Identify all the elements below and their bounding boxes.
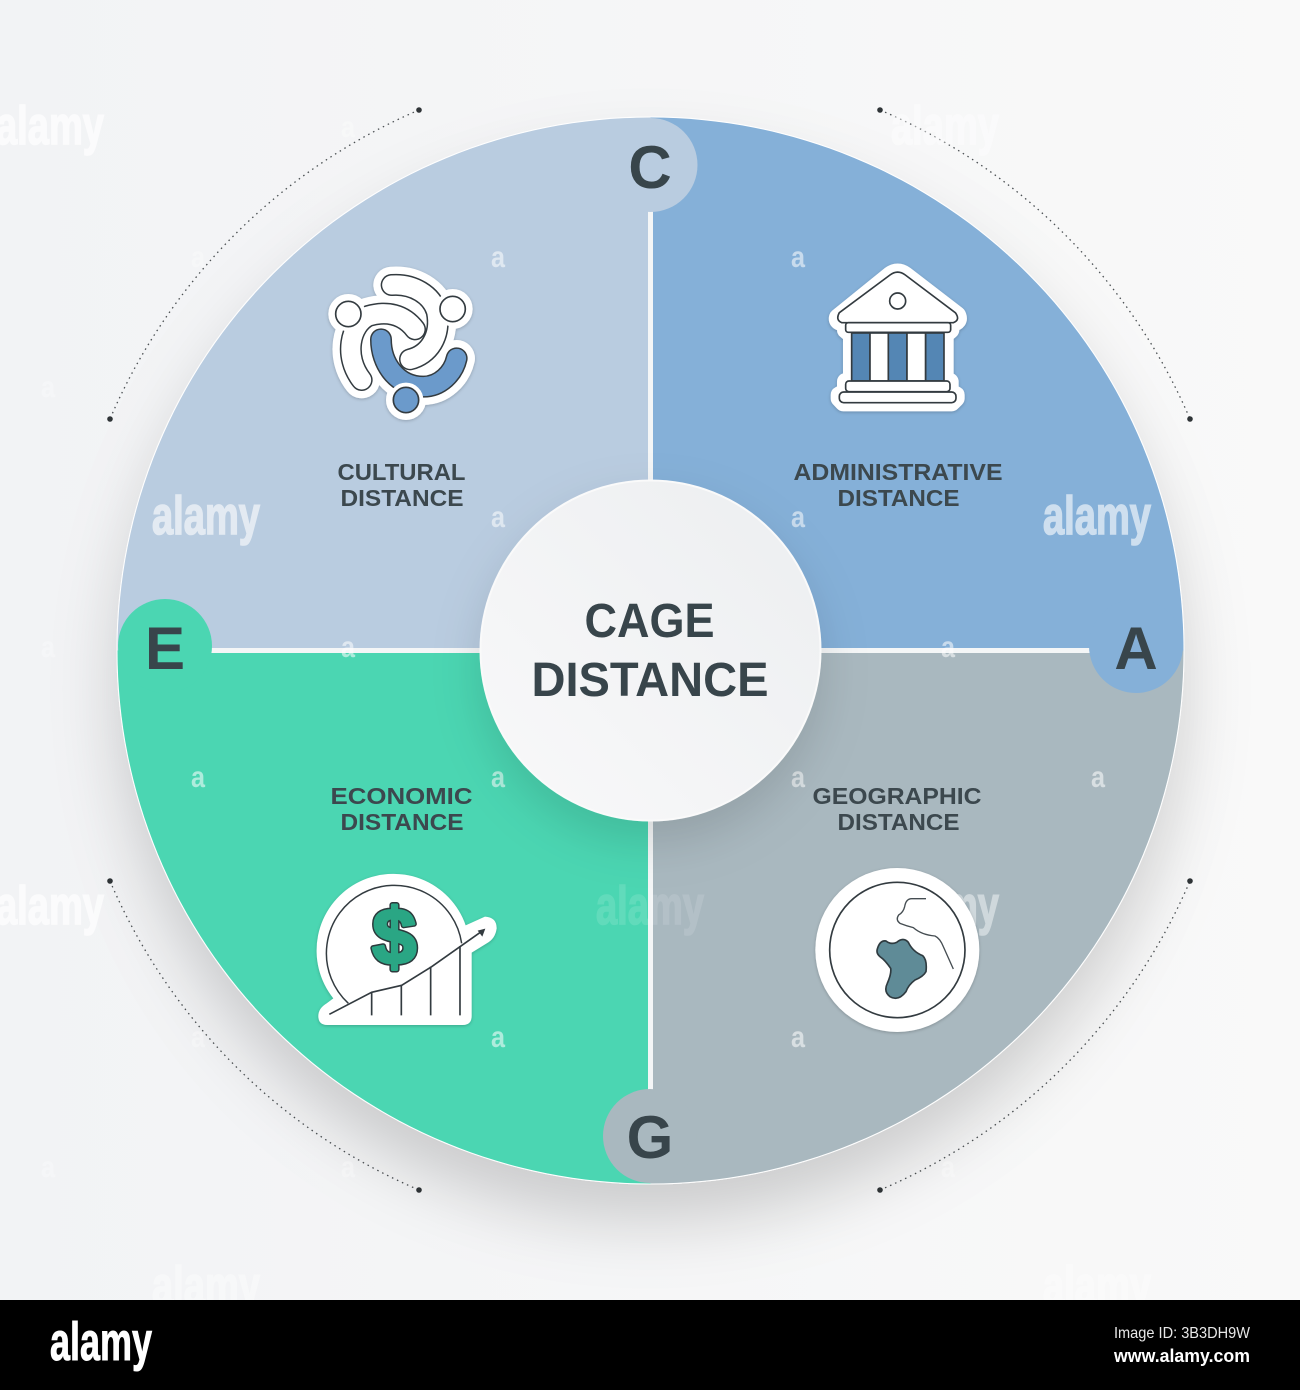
watermarks: a: [941, 1151, 955, 1184]
decorative dotted arcs: [107, 107, 1193, 1193]
badge: E: E: [145, 615, 185, 682]
label: administrative distance: [794, 459, 1002, 511]
badge: C: [604, 118, 698, 212]
icon: globe: [815, 868, 979, 1032]
dollar sign: $: [372, 891, 416, 980]
arrow head: [478, 929, 485, 937]
dollar sign outline: $: [372, 891, 416, 980]
watermarks: alamy: [152, 486, 260, 546]
label: cultural distance: DISTANCE: [340, 485, 464, 511]
label: economic distance: ECONOMIC: [330, 783, 472, 809]
label: geographic distance: GEOGRAPHIC: [812, 783, 982, 809]
watermarks: alamy: [0, 876, 104, 936]
icon: government building: [837, 272, 958, 403]
watermarks: a: [491, 761, 505, 794]
watermarks: [0, 96, 1151, 1316]
footer logo: alamy: [50, 1312, 152, 1372]
label: geographic distance: DISTANCE: [838, 809, 960, 835]
label: economic distance: DISTANCE: [340, 809, 464, 835]
image id: Image ID: 3B3DH9W: [1114, 1325, 1251, 1342]
watermarks: a: [191, 1021, 205, 1054]
center hub with title: DISTANCE: [532, 654, 768, 707]
panel: economic distance sector: [118, 650, 650, 1184]
footer bar: [0, 1300, 1300, 1390]
watermarks: alamy: [152, 1256, 260, 1316]
label: geographic distance: [812, 783, 982, 835]
sector dividers: [205, 205, 1095, 1095]
badge: A: A: [1114, 615, 1158, 682]
center hub with title: CAGE: [584, 595, 714, 648]
watermarks: a: [491, 501, 505, 534]
watermarks: alamy: [1043, 486, 1151, 546]
icon: dollar coin with growth chart: [317, 874, 497, 1025]
badge: E: [118, 599, 212, 693]
watermarks: a: [791, 1021, 805, 1054]
watermarks: a: [491, 241, 505, 274]
watermarks: a: [41, 371, 55, 404]
disc shadow base: [116, 116, 1184, 1184]
continent outline: [897, 899, 953, 969]
watermarks: a: [341, 1151, 355, 1184]
panel: administrative distance sector: [650, 118, 1184, 650]
panel: cultural distance sector: [118, 118, 650, 650]
watermarks: a: [491, 1021, 505, 1054]
watermarks: a: [41, 631, 55, 664]
watermarks: a: [941, 631, 955, 664]
center hub with title: [480, 480, 820, 820]
badge: A: [1089, 599, 1183, 693]
watermarks: alamy: [1043, 1256, 1151, 1316]
watermarks: a: [341, 111, 355, 144]
label: administrative distance: ADMINISTRATIVE: [794, 459, 1002, 485]
watermarks: a: [791, 241, 805, 274]
continent filled: [877, 939, 926, 998]
watermarks: a: [791, 761, 805, 794]
watermarks: a: [191, 241, 205, 274]
watermarks: alamy: [891, 96, 999, 156]
watermarks: alamy: [891, 876, 999, 936]
label: economic distance: [330, 783, 472, 835]
watermarks: alamy: [0, 96, 104, 156]
badge: C: C: [628, 134, 672, 201]
watermarks: a: [791, 501, 805, 534]
watermarks: a: [1091, 761, 1105, 794]
label: cultural distance: [338, 459, 466, 511]
watermarks: a: [341, 631, 355, 664]
label: cultural distance: CULTURAL: [338, 459, 466, 485]
panel: geographic distance sector: [650, 650, 1184, 1184]
badge: G: [603, 1089, 697, 1183]
watermarks: a: [41, 1151, 55, 1184]
watermarks: alamy: [596, 876, 704, 936]
website: www.alamy.com: [1113, 1346, 1250, 1366]
icon: people circle: [332, 285, 469, 416]
watermarks: a: [191, 761, 205, 794]
label: administrative distance: DISTANCE: [838, 485, 960, 511]
badge: G: G: [627, 1104, 673, 1171]
